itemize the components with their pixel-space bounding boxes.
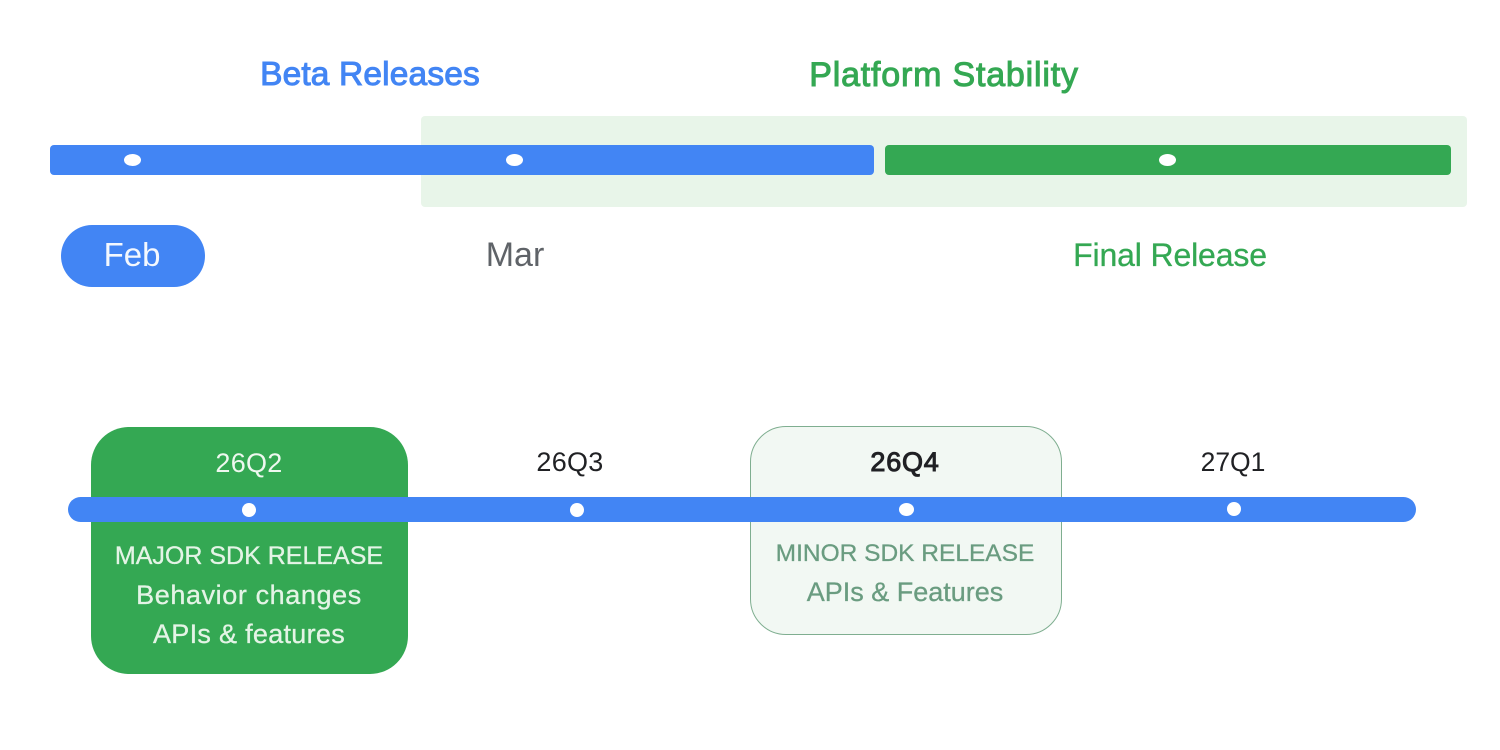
marker: 26Q2 [242,503,256,517]
heading: Beta Releases: Beta Releases [260,56,480,93]
label: Final Release: Final Release [1073,237,1267,273]
label: Mar: Mar [486,236,544,274]
label: 26Q2: 26Q2 [215,448,283,478]
timeline bar [68,497,1416,522]
text: major SDK release: Behavior changes [136,580,362,610]
panel: platform stability highlight [421,116,1467,207]
label: 26Q4: 26Q4 [870,447,940,477]
text: minor SDK release: MINOR SDK RELEASE [776,540,1034,567]
panel: 26Q2 major release [91,427,408,674]
marker: Mar [506,154,523,166]
heading: Platform Stability: Platform Stability [809,56,1079,94]
text: major SDK release: APIs & features [153,619,345,649]
text: major SDK release [115,542,383,649]
marker: 26Q4 [899,503,914,516]
label: 26Q3: 26Q3 [536,447,604,477]
text: major SDK release: MAJOR SDK RELEASE [115,542,383,570]
label: 27Q1: 27Q1 [1201,447,1265,477]
marker: 27Q1 [1227,502,1241,516]
panel: 26Q4 minor release [750,426,1062,635]
marker: 26Q3 [570,503,584,517]
pill: Feb [61,225,205,287]
marker: Feb [124,154,141,166]
text: minor SDK release: APIs & Features [807,577,1003,607]
bar: final release [885,145,1451,175]
bar: beta releases [50,145,874,175]
text: minor SDK release [776,540,1034,607]
label: Feb: Feb [104,236,160,273]
marker: Final Release [1159,154,1176,166]
